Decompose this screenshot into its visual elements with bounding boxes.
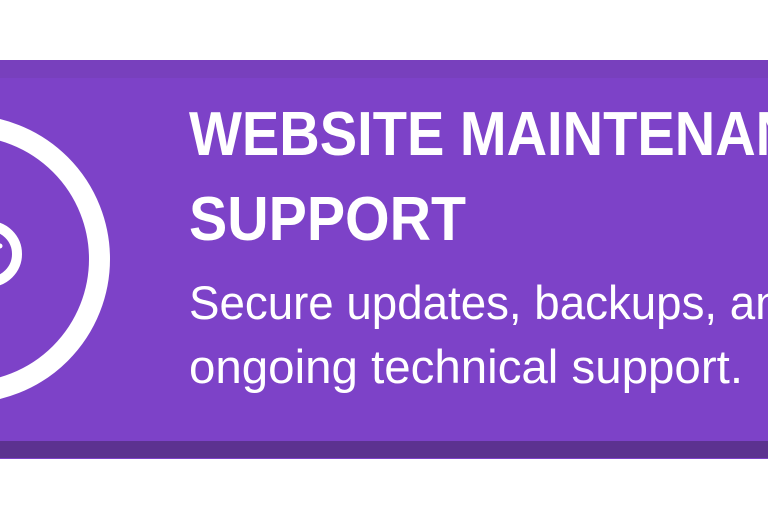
description text [189,276,768,393]
heading: SUPPORT [189,185,466,254]
panel: purple banner [0,60,768,459]
icon: disc outline [0,126,100,392]
heading [189,100,768,254]
description text: ongoing technical support. [189,340,743,393]
